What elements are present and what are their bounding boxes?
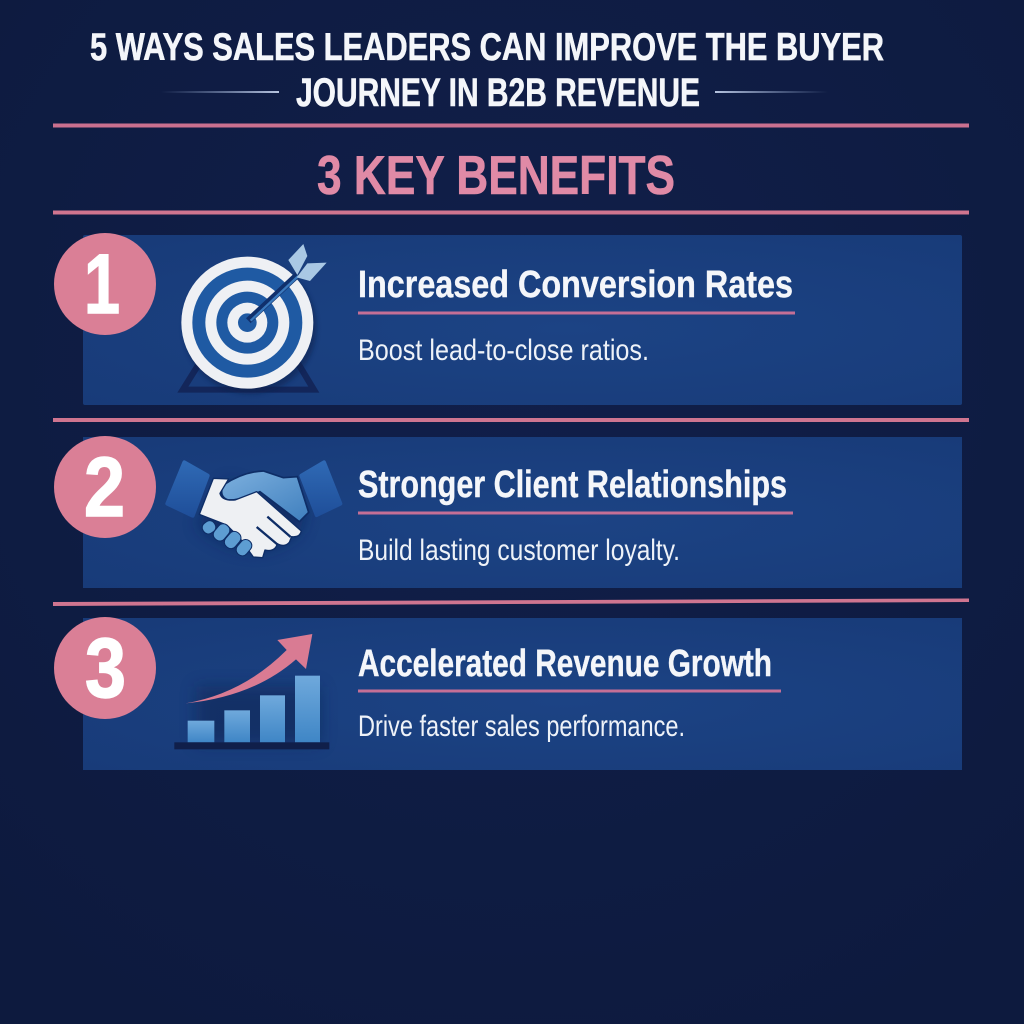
- title: [90, 26, 884, 115]
- icon: handshake: [167, 462, 340, 558]
- panel: benefit 3: [54, 617, 962, 770]
- heading: 3 key benefits: 3 KEY BENEFITS: [317, 144, 675, 206]
- benefit 2 description: Build lasting customer loyalty.: [358, 534, 680, 567]
- number badge 2: [54, 436, 156, 538]
- panel: benefit 2: [54, 436, 962, 588]
- number badge 3: [54, 617, 156, 719]
- benefit 2 title: Stronger Client Relationships: [358, 464, 787, 506]
- benefit 1 title: Increased Conversion Rates: [358, 264, 793, 306]
- benefit 1 description: Boost lead-to-close ratios.: [358, 334, 649, 367]
- number badge 3: 3: [85, 621, 126, 715]
- panel: benefit 1: [54, 233, 962, 405]
- benefit 3 title: Accelerated Revenue Growth: [358, 643, 772, 685]
- benefit 3 description: Drive faster sales performance.: [358, 710, 685, 743]
- icon: growth chart with arrow: [174, 634, 329, 749]
- number badge 1: 1: [84, 237, 120, 331]
- icon: target with arrow: [177, 244, 327, 394]
- card 3 background: [83, 618, 962, 770]
- title: JOURNEY IN B2B REVENUE: [296, 71, 700, 115]
- number badge 1: [54, 233, 156, 335]
- card 2 background: [83, 437, 962, 588]
- number badge 2: 2: [84, 440, 125, 534]
- card 1 background: [83, 235, 962, 405]
